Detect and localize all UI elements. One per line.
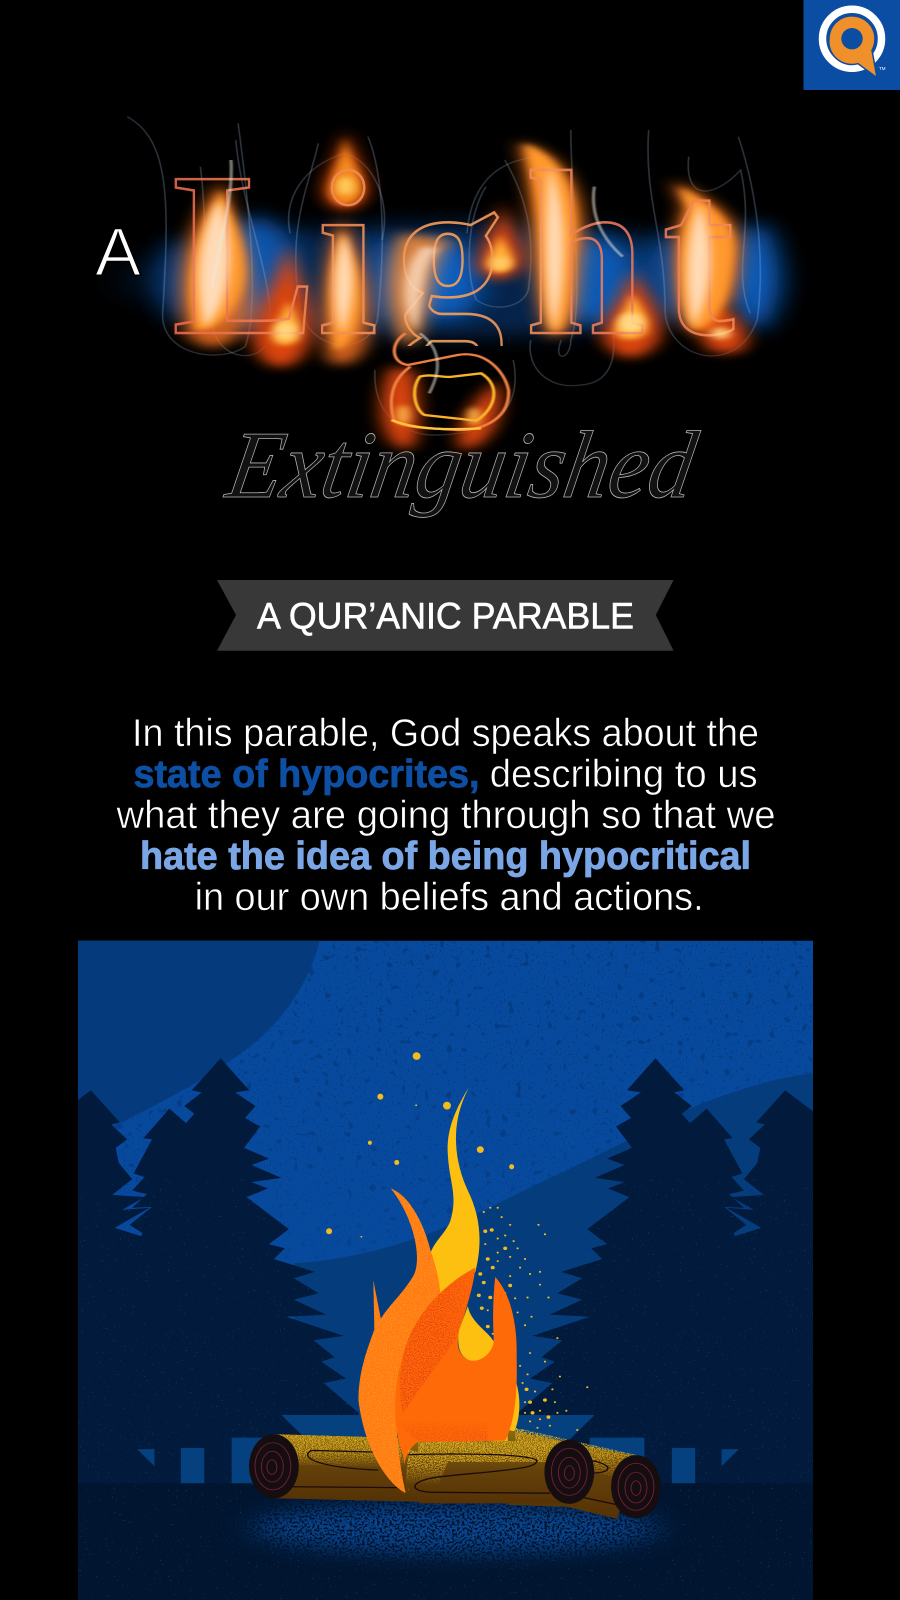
word: Light: Light [172,124,734,385]
ribbon: A Qur'anic Parable: A QUR’ANIC PARABLE [257,595,634,636]
right trees [515,1058,816,1485]
fire halo [181,128,747,450]
word: Extinguished: Extinguished [218,412,705,518]
intro text: In this parable, God speaks about the [132,712,759,755]
sky [78,940,813,1320]
fire cream core [199,167,730,426]
left trees [60,1058,361,1485]
hill [294,1073,813,1415]
gap behind fire [361,1415,518,1485]
intro text: in our own beliefs and actions. [195,876,704,919]
sparks small [484,1208,587,1432]
intro text: describing to us [490,753,758,796]
blue glow [163,217,778,330]
intro text: what they are going through so that we [116,794,775,837]
wide blue aura [141,223,764,337]
back left log [249,1434,418,1502]
ribbon: A Qur'anic Parable [217,580,674,651]
front log [404,1440,594,1504]
intro text: hate the idea of being hypocritical [140,835,751,878]
back flame [431,1087,519,1443]
moon shadow [78,941,320,1133]
flame yellow drop [458,1306,494,1361]
main flame right [395,1268,517,1491]
word: A: A [95,214,142,290]
flame cores over letters [199,160,730,430]
sky speckle large [78,941,813,1341]
fire orange [190,137,734,350]
flame artwork behind letters [127,117,778,450]
smoke drapes [127,117,760,435]
night scene [78,940,813,1436]
title: A Light Extinguished [95,117,778,518]
main flame left [358,1189,441,1493]
lower g loop [391,333,509,430]
campfire illustration panel [60,941,856,1600]
ground [60,1483,856,1600]
floating embers [326,1052,514,1238]
blue gaps between trunks [137,1415,361,1483]
ground glow [251,1502,661,1554]
intro text: state of hypocrites, [134,753,480,796]
trees and fire [60,1058,856,1600]
back right log [508,1428,661,1519]
logo badge [804,0,900,90]
intro text [116,712,775,919]
sparks large [479,1230,548,1417]
logo badge: TM [879,66,886,71]
tree speckle [78,1180,813,1600]
sky speckle fine [78,941,813,1341]
smoke highlights [212,160,623,393]
